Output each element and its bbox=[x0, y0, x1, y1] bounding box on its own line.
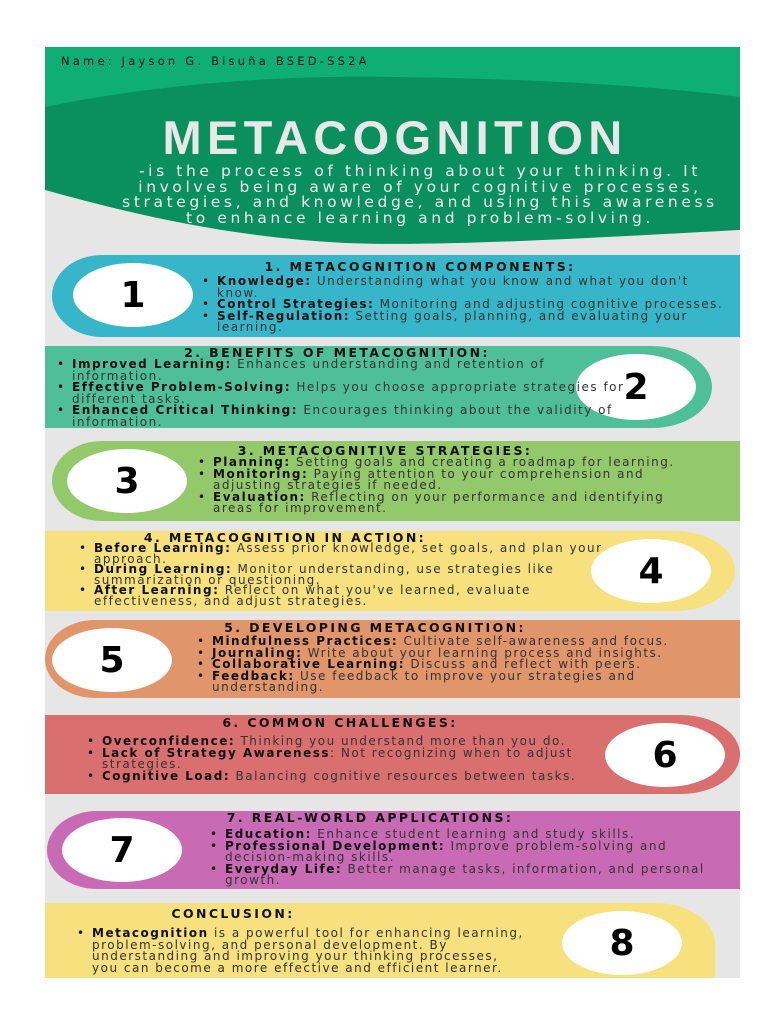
subtitle: strategies, and knowledge, and using this awareness bbox=[122, 193, 718, 211]
list 4 bbox=[79, 541, 603, 608]
text: • bbox=[198, 466, 207, 480]
panel 5 bbox=[45, 620, 740, 698]
list 6 bbox=[87, 734, 576, 782]
panel 2 bbox=[45, 346, 712, 428]
list 3: Planning: Setting goals and creating a roadmap for learning. bbox=[213, 455, 675, 469]
list 2 bbox=[57, 357, 624, 428]
name: Name: Jayson G. Bisuña BSED-SS2A bbox=[61, 54, 370, 68]
heading 2: 2. BENEFITS OF METACOGNITION: bbox=[184, 345, 490, 360]
circle 1 bbox=[73, 263, 193, 327]
list 6: Lack of Strategy Awareness: Not recognizing when to adjust bbox=[102, 746, 573, 760]
text: • bbox=[79, 562, 88, 576]
circle 4 bbox=[591, 539, 711, 603]
panel 6 bbox=[45, 715, 740, 794]
list 8 bbox=[77, 926, 524, 974]
circle 3: 3 bbox=[114, 460, 140, 502]
text: • bbox=[198, 490, 207, 504]
text: • bbox=[198, 455, 207, 469]
list 3: Evaluation: Reflecting on your performance and identifying bbox=[213, 490, 664, 504]
list 2: Improved Learning: Enhances understanding and retention of bbox=[72, 357, 545, 371]
text: • bbox=[202, 274, 211, 288]
text: • bbox=[79, 583, 88, 597]
text: • bbox=[77, 926, 86, 940]
text: • bbox=[197, 634, 206, 648]
panel 4 bbox=[45, 531, 735, 611]
panel 3 bbox=[52, 441, 740, 521]
circle 5: 5 bbox=[99, 640, 125, 680]
list 6: strategies. bbox=[102, 757, 182, 771]
panel 8 bbox=[45, 903, 715, 978]
text: • bbox=[210, 838, 219, 852]
list 4: Before Learning: Assess prior knowledge, set goals, and plan your bbox=[94, 541, 603, 555]
list 1: Self-Regulation: Setting goals, planning, and evaluating your bbox=[217, 308, 688, 322]
list 2: different tasks. bbox=[72, 392, 186, 406]
circle 2 bbox=[576, 354, 696, 420]
circle 7: 7 bbox=[109, 830, 135, 870]
list 5: understanding. bbox=[212, 680, 324, 694]
text: • bbox=[202, 297, 211, 311]
text: • bbox=[57, 403, 66, 417]
panel 7 bbox=[47, 811, 740, 889]
list 7: growth. bbox=[225, 873, 281, 887]
list 4: approach. bbox=[94, 552, 167, 566]
text: • bbox=[197, 646, 206, 660]
subtitle bbox=[122, 162, 718, 226]
circle 5 bbox=[52, 628, 172, 692]
subtitle: involves being aware of your cognitive processes, bbox=[138, 178, 702, 196]
circle 4: 4 bbox=[638, 550, 664, 592]
list 5: Journaling: Write about your learning process and insights. bbox=[212, 646, 663, 660]
list 4: After Learning: Reflect on what you've learned, evaluate bbox=[94, 583, 531, 597]
list 2: information. bbox=[72, 414, 163, 428]
text: • bbox=[87, 734, 96, 748]
list 1 bbox=[202, 274, 723, 334]
list 4: summarization or questioning. bbox=[94, 573, 321, 587]
list 7: Everyday Life: Better manage tasks, information, and personal bbox=[225, 862, 705, 876]
text: • bbox=[57, 357, 66, 371]
heading 3: 3. METACOGNITIVE STRATEGIES: bbox=[238, 443, 532, 458]
heading 4: 4. METACOGNITION IN ACTION: bbox=[144, 530, 426, 545]
list 3 bbox=[198, 455, 675, 515]
list 7: Professional Development: Improve problem-solving and bbox=[225, 838, 667, 852]
list 2: Enhanced Critical Thinking: Encourages thinking about the validity of bbox=[72, 403, 613, 417]
list 1: know. bbox=[217, 286, 259, 300]
list 2: Effective Problem-Solving: Helps you choose appropriate strategies for bbox=[72, 380, 624, 394]
heading 1: 1. METACOGNITION COMPONENTS: bbox=[264, 259, 576, 274]
list 5: Feedback: Use feedback to improve your strategies and bbox=[212, 668, 636, 682]
list 7: decision-making skills. bbox=[225, 850, 395, 864]
text: • bbox=[79, 541, 88, 555]
heading 8: CONCLUSION: bbox=[171, 906, 295, 921]
list 8: understanding and improving your thinking processes, bbox=[92, 949, 498, 963]
list 6: Overconfidence: Thinking you understand more than you do. bbox=[102, 734, 566, 748]
circle 7 bbox=[62, 818, 182, 882]
circle 6: 6 bbox=[652, 734, 678, 776]
text: • bbox=[197, 657, 206, 671]
circle 8 bbox=[562, 911, 682, 975]
text: • bbox=[197, 668, 206, 682]
circle 3 bbox=[67, 449, 187, 513]
list 3: Monitoring: Paying attention to your comprehension and bbox=[213, 466, 644, 480]
list 7: Education: Enhance student learning and study skills. bbox=[225, 827, 635, 841]
heading 6: 6. COMMON CHALLENGES: bbox=[222, 715, 458, 730]
heading 5: 5. DEVELOPING METACOGNITION: bbox=[224, 620, 526, 635]
heading 7: 7. REAL-WORLD APPLICATIONS: bbox=[227, 810, 513, 825]
list 8: problem-solving, and personal development. By bbox=[92, 938, 448, 952]
list 3: adjusting strategies if needed. bbox=[213, 478, 443, 492]
list 7 bbox=[210, 827, 705, 887]
list 4: effectiveness, and adjust strategies. bbox=[94, 594, 368, 608]
subtitle: to enhance learning and problem-solving. bbox=[186, 208, 654, 226]
text: • bbox=[87, 746, 96, 760]
list 1: Control Strategies: Monitoring and adjusting cognitive processes. bbox=[217, 297, 723, 311]
text: • bbox=[57, 380, 66, 394]
title: METACOGNITION bbox=[163, 111, 627, 164]
list 8: Metacognition is a powerful tool for enhancing learning, bbox=[92, 926, 524, 940]
list 8: you can become a more effective and efficient learner. bbox=[92, 960, 503, 974]
subtitle: -is the process of thinking about your thinking. It bbox=[139, 162, 701, 180]
list 5: Collaborative Learning: Discuss and reflect with peers. bbox=[212, 657, 641, 671]
panel 1 bbox=[52, 255, 740, 337]
circle 6 bbox=[605, 723, 725, 787]
text: • bbox=[210, 862, 219, 876]
text: • bbox=[210, 827, 219, 841]
list 4: During Learning: Monitor understanding, use strategies like bbox=[94, 562, 554, 576]
list 1: learning. bbox=[217, 320, 283, 334]
text: • bbox=[202, 308, 211, 322]
list 6: Cognitive Load: Balancing cognitive resources between tasks. bbox=[102, 768, 576, 782]
list 1: Knowledge: Understanding what you know and what you don't bbox=[217, 274, 689, 288]
list 5 bbox=[197, 634, 669, 694]
text: • bbox=[87, 768, 96, 782]
header bbox=[45, 47, 740, 244]
list 3: areas for improvement. bbox=[213, 501, 387, 515]
circle 8: 8 bbox=[609, 922, 635, 964]
circle 2: 2 bbox=[623, 366, 649, 408]
list 5: Mindfulness Practices: Cultivate self-awareness and focus. bbox=[212, 634, 669, 648]
list 2: information. bbox=[72, 368, 163, 382]
circle 1: 1 bbox=[120, 274, 146, 316]
